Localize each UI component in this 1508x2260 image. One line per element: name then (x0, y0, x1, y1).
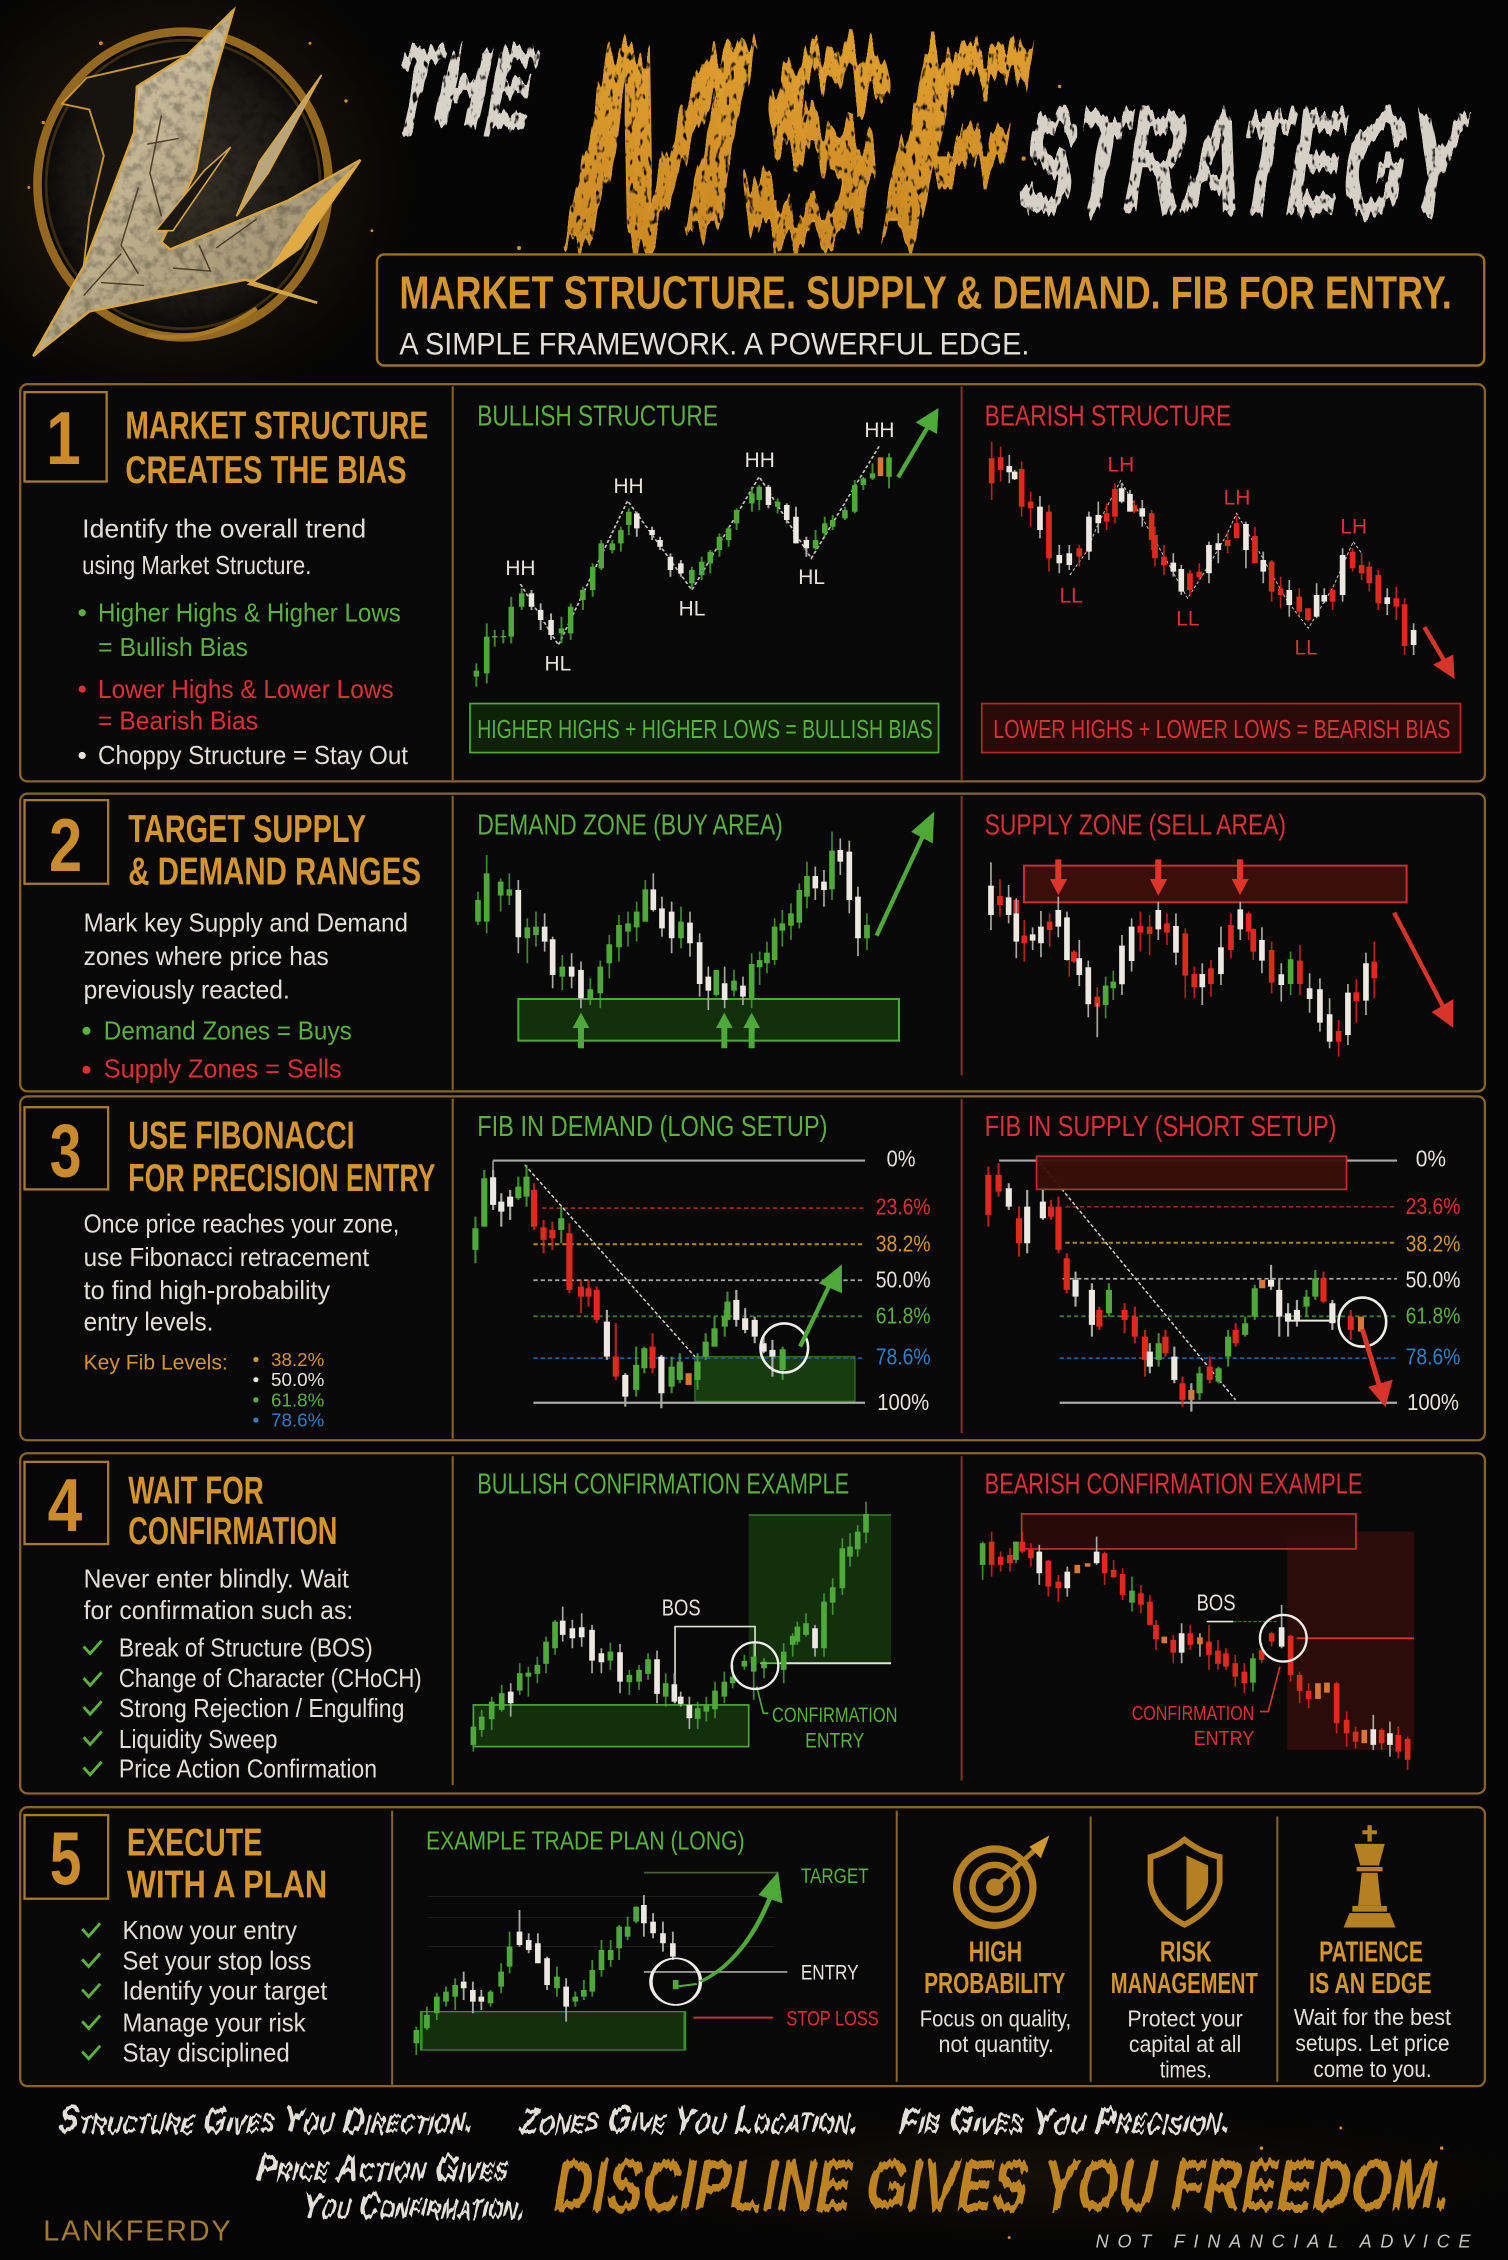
chart title: bullish structure: BULLISH STRUCTURE (477, 400, 718, 432)
key fib levels: 78.6% (271, 1410, 324, 1431)
trade labels: STOP LOSS (786, 2006, 879, 2031)
checklist 5 (82, 1917, 328, 2068)
arrows into supply zone (1050, 859, 1249, 896)
feature: patience is an edge: setups. Let price (1295, 2030, 1450, 2056)
heading 2: TARGET SUPPLY (128, 808, 366, 851)
demand zone and profit zone (473, 1515, 891, 1747)
entry circle: bearish (1260, 1615, 1307, 1662)
candlestick chart: bullish confirmation (473, 1502, 891, 1752)
fibonacci levels: long (493, 1145, 931, 1415)
footer price action text: You Confirmation. (300, 2184, 528, 2225)
intro text 4 (84, 1565, 353, 1625)
label: BOS bearish: BOS (1197, 1589, 1236, 1615)
swing labels: HH and HL: HL (798, 566, 825, 589)
swing labels: HH and HL (505, 419, 895, 675)
panel 5: execute with a plan (20, 1807, 1485, 2086)
fibonacci levels: short: 38.2% (1406, 1230, 1460, 1256)
number badge 4 (25, 1462, 108, 1547)
feature: high probability: Focus on quality, (920, 2005, 1071, 2031)
candlestick chart: bearish confirmation (983, 1514, 1414, 1770)
brand name: LANKFERDY (43, 2215, 231, 2247)
logo emblem (33, 10, 360, 356)
title: MSF: MSF (537, 0, 1054, 296)
icon: shield (1150, 1840, 1220, 1925)
heading 5 (127, 1821, 327, 1906)
intro text 3: entry levels. (84, 1309, 213, 1337)
intro text 2: zones where price has (84, 943, 329, 971)
candlestick chart: bullish structure (476, 445, 889, 687)
fibonacci levels: short: 100% (1407, 1389, 1459, 1415)
footer tagline row: Structure Gives You Direction. (57, 2099, 476, 2140)
bullet list 1: Choppy Structure = Stay Out (98, 742, 409, 770)
intro text 2: previously reacted. (84, 976, 290, 1004)
demand zone: trade plan (421, 2012, 685, 2050)
intro text 3: use Fibonacci retracement (84, 1244, 370, 1272)
entry circle: bullish (732, 1642, 778, 1689)
chart title: fib in supply: FIB IN SUPPLY (SHORT SETUP) (985, 1111, 1336, 1143)
feature: high probability (920, 1936, 1071, 2057)
candlestick chart: bearish structure (992, 442, 1414, 655)
checklist 5: Know your entry (123, 1917, 297, 1945)
arrows into demand zone (573, 1013, 760, 1048)
trade labels: TARGET (801, 1863, 869, 1888)
candlestick chart: fib short (988, 1163, 1361, 1412)
footer glow (548, 2112, 1508, 2242)
heading 2 (128, 808, 421, 893)
fibonacci levels: short (999, 1145, 1460, 1415)
key fib levels: Key Fib Levels: (84, 1350, 228, 1375)
bullet list 1: Lower Highs & Lower Lows (98, 676, 394, 704)
bullet list 1: = Bullish Bias (98, 634, 248, 662)
number badge 5 (25, 1815, 108, 1900)
feature: patience is an edge (1294, 1936, 1452, 2082)
fibonacci levels: short: 50.0% (1406, 1266, 1460, 1292)
callout: bearish bias (982, 704, 1460, 753)
candlestick chart: supply zone (991, 859, 1407, 1057)
bullet list 1: = Bearish Bias (98, 707, 258, 735)
arrow: long up (800, 1264, 842, 1347)
arrow: bullish up (898, 408, 939, 477)
bullet list 2: Demand Zones = Buys (104, 1017, 352, 1045)
icon: target (957, 1835, 1050, 1925)
arrow: bearish down (1424, 627, 1455, 679)
arrow: supply down (1394, 913, 1453, 1028)
number badge 2: 2 (49, 803, 82, 887)
key fib levels (84, 1349, 324, 1431)
heading 4: WAIT FOR (128, 1470, 264, 1513)
fibonacci levels: short: 0% (1416, 1145, 1446, 1171)
swing labels: HH and HL: HL (545, 652, 571, 675)
label: BOS bullish: BOS (662, 1594, 701, 1620)
fibonacci levels: short: 61.8% (1406, 1302, 1460, 1328)
demand zone band (518, 999, 899, 1041)
feature: risk management: times. (1160, 2056, 1212, 2082)
intro text 3 (84, 1211, 399, 1337)
heading 1: CREATES THE BIAS (125, 449, 407, 492)
heading 3 (128, 1114, 435, 1200)
swing labels: HH and HL: HH (613, 475, 644, 498)
feature: risk management (1111, 1936, 1258, 2082)
footer tagline row: Fib Gives You Precision. (897, 2099, 1233, 2140)
subtitle box (377, 254, 1484, 365)
heading 3: FOR PRECISION ENTRY (128, 1157, 435, 1200)
intro text 2 (84, 909, 408, 1004)
footer price action text: Price Action Gives (254, 2147, 511, 2188)
swing labels: LH and LL (1060, 453, 1367, 660)
label: confirmation entry bullish: CONFIRMATION (772, 1702, 897, 1727)
icon: chess king (1344, 1825, 1396, 1928)
label: confirmation entry bearish: CONFIRMATION (1132, 1703, 1254, 1725)
callout: bullish bias (470, 704, 939, 753)
swing labels: HH and HL: HH (745, 449, 775, 472)
feature: patience is an edge: PATIENCE (1319, 1936, 1423, 1968)
chart title: supply zone: SUPPLY ZONE (SELL AREA) (985, 810, 1286, 842)
entry circle: long (760, 1323, 808, 1372)
intro text 4: Never enter blindly. Wait (84, 1565, 350, 1593)
checklist 4: Change of Character (CHoCH) (119, 1665, 422, 1693)
intro text 3: Once price reaches your zone, (84, 1211, 399, 1239)
number badge 1 (25, 392, 107, 482)
checklist 4: Liquidity Sweep (119, 1726, 278, 1754)
chart title: bearish confirmation: BEARISH CONFIRMATION EXAMPLE (985, 1469, 1362, 1501)
heading 4 (128, 1470, 337, 1553)
supply zone: fib short (1037, 1156, 1347, 1189)
panel 1: market structure (20, 384, 1485, 781)
chart title: example trade plan: EXAMPLE TRADE PLAN (LONG) (426, 1828, 745, 1856)
checklist 5: Set your stop loss (123, 1947, 311, 1975)
feature: patience is an edge: come to you. (1313, 2056, 1432, 2082)
subtitle line 2: A SIMPLE FRAMEWORK. A POWERFUL EDGE. (399, 326, 1029, 362)
panel 4: confirmation (20, 1453, 1485, 1793)
intro text 2: Mark key Supply and Demand (84, 909, 408, 937)
supply zone band (1024, 866, 1407, 902)
heading 5: WITH A PLAN (127, 1863, 327, 1906)
title: THE: THE (381, 26, 549, 152)
checklist 4: Break of Structure (BOS) (119, 1635, 373, 1663)
arrow: demand up (877, 812, 934, 936)
swing labels: HH and HL: HH (864, 419, 895, 442)
feature: patience is an edge: IS AN EDGE (1309, 1968, 1432, 2000)
callout: bullish bias: HIGHER HIGHS + HIGHER LOWS = BULLISH BIAS (477, 716, 933, 744)
feature: patience is an edge: Wait for the best (1294, 2004, 1452, 2030)
heading 1 (125, 404, 428, 492)
intro text 1 (82, 516, 366, 580)
feature: high probability: HIGH (969, 1936, 1022, 1968)
trade plan chart (416, 1872, 787, 2055)
heading 2: & DEMAND RANGES (128, 850, 421, 893)
intro text 3: to find high-probability (84, 1277, 330, 1305)
footer tagline row: Zones Give You Location. (517, 2099, 861, 2140)
fibonacci levels: short: 78.6% (1406, 1344, 1460, 1370)
chart title: demand zone: DEMAND ZONE (BUY AREA) (477, 810, 783, 842)
feature: risk management: Protect your (1127, 2005, 1243, 2031)
swing labels: HH and HL: HH (505, 557, 536, 580)
logo glow (0, 0, 418, 411)
supply zone and profit zone (1022, 1514, 1414, 1750)
feature: risk management: capital at all (1129, 2031, 1241, 2057)
fibonacci levels: long: 23.6% (876, 1194, 931, 1220)
number badge 5: 5 (50, 1816, 81, 1900)
chart title: bullish confirmation: BULLISH CONFIRMATION EXAMPLE (477, 1469, 849, 1501)
fibonacci levels: long: 50.0% (876, 1266, 931, 1292)
fibonacci levels: long: 38.2% (876, 1230, 931, 1256)
label: confirmation entry bearish: ENTRY (1194, 1728, 1255, 1750)
heading 4: CONFIRMATION (128, 1510, 337, 1553)
swing labels: LH and LL: LH (1224, 487, 1250, 510)
arrow: short down (1362, 1329, 1393, 1407)
entry circle: trade plan (651, 1958, 700, 2005)
entry circle: short (1339, 1298, 1386, 1347)
disclaimer: NOT FINANCIAL ADVICE (1096, 2232, 1471, 2252)
bullet list 1 (79, 599, 409, 770)
heading 1: MARKET STRUCTURE (125, 404, 428, 447)
panel 3: fibonacci (20, 1096, 1485, 1440)
number badge 4: 4 (48, 1463, 82, 1547)
key fib levels: 38.2% (271, 1349, 324, 1370)
intro text 4: for confirmation such as: (84, 1597, 353, 1625)
chart title: bearish structure: BEARISH STRUCTURE (985, 400, 1231, 432)
fibonacci levels: long: 0% (887, 1145, 915, 1171)
checklist 4: Strong Rejection / Engulfing (119, 1695, 404, 1723)
bullet list 2 (82, 1017, 352, 1084)
candlestick chart: fib long (475, 1165, 783, 1408)
swing labels: LH and LL: LL (1295, 637, 1318, 660)
candlestick chart: demand zone (478, 832, 899, 1048)
number badge 1: 1 (46, 396, 81, 480)
checklist 5: Manage your risk (123, 2009, 306, 2037)
swing labels: LH and LL: LH (1340, 515, 1367, 538)
fibonacci levels: long: 78.6% (876, 1344, 931, 1370)
panel 2: supply and demand (20, 794, 1485, 1091)
fibonacci levels: long: 100% (877, 1389, 929, 1415)
feature: risk management: RISK (1160, 1936, 1212, 1968)
trade labels: ENTRY (801, 1959, 859, 1984)
trade labels (786, 1863, 879, 2031)
number badge 3: 3 (50, 1108, 81, 1192)
swing labels: LH and LL: LL (1060, 585, 1083, 608)
checklist 5: Identify your target (123, 1978, 328, 2006)
swing labels: HH and HL: HL (679, 598, 705, 621)
bullet list 1: Higher Highs & Higher Lows (98, 599, 401, 627)
key fib levels: 61.8% (271, 1389, 324, 1410)
heading 5: EXECUTE (127, 1821, 262, 1864)
fibonacci levels: long: 61.8% (876, 1302, 931, 1328)
fibonacci levels: short: 23.6% (1406, 1193, 1460, 1219)
checklist 4 (84, 1635, 422, 1784)
label: confirmation entry bullish (772, 1702, 897, 1752)
number badge 2 (25, 800, 108, 887)
checklist 5: Stay disciplined (123, 2040, 290, 2068)
feature: risk management: MANAGEMENT (1111, 1968, 1258, 2000)
footer price action text (254, 2147, 528, 2225)
heading 3: USE FIBONACCI (128, 1114, 355, 1157)
label: confirmation entry bearish (1132, 1703, 1255, 1750)
footer tagline row (57, 2099, 1233, 2140)
chart title: fib in demand: FIB IN DEMAND (LONG SETUP) (477, 1111, 828, 1143)
feature: high probability: not quantity. (939, 2031, 1054, 2057)
arrow: curve to target (700, 1872, 782, 1982)
intro text 1: using Market Structure. (82, 552, 311, 580)
key fib levels: 50.0% (271, 1369, 324, 1390)
demand zone: fib long (695, 1357, 855, 1401)
feature: high probability: PROBABILITY (924, 1968, 1065, 2000)
bullet list 2: Supply Zones = Sells (104, 1056, 342, 1084)
intro text 1: Identify the overall trend (82, 516, 366, 544)
swing labels: LH and LL: LH (1108, 453, 1134, 476)
checklist 4: Price Action Confirmation (119, 1756, 377, 1784)
label: confirmation entry bullish: ENTRY (805, 1727, 864, 1752)
number badge 3 (25, 1107, 108, 1192)
swing labels: LH and LL: LL (1176, 608, 1200, 631)
